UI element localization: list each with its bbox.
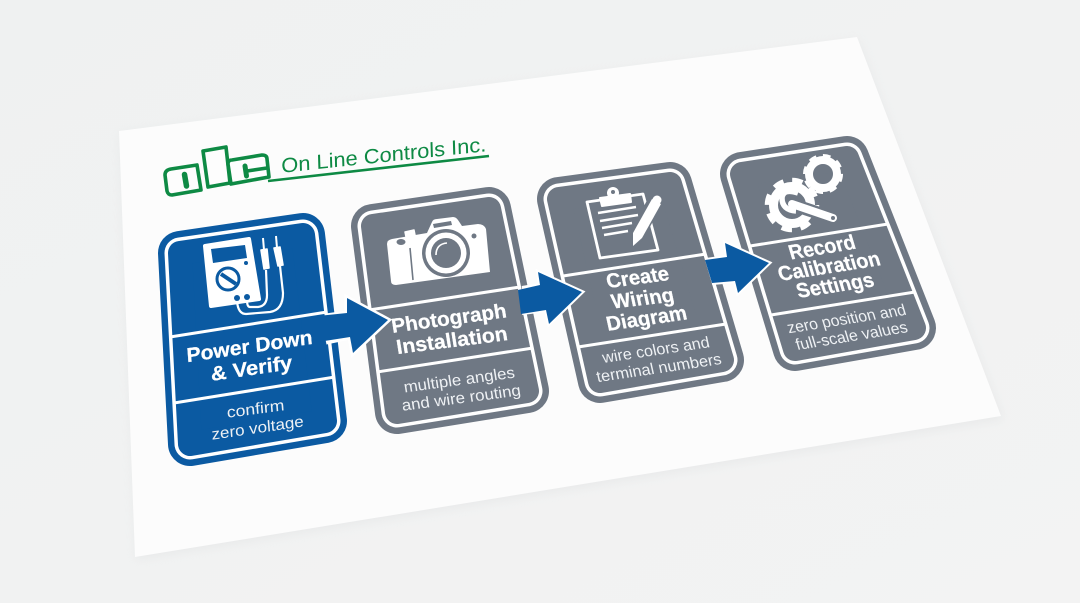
text: zero position and full-scale values: zero position and [785, 302, 908, 337]
panel: step 1 power down and verify [170, 235, 335, 444]
heading: photograph installation [390, 300, 509, 359]
text: confirm zero voltage [211, 397, 304, 444]
panel: step 2 photograph installation [369, 209, 533, 415]
text: confirm zero voltage: confirm [226, 397, 285, 422]
text: zero position and full-scale values [785, 302, 910, 354]
paper sheet [119, 37, 1004, 560]
icon: multimeter [205, 236, 283, 314]
text: wire colors and terminal numbers: terminal numbers [595, 351, 723, 386]
icon: gears and wrench [768, 156, 841, 230]
text: zero position and full-scale values: full-scale values [794, 319, 910, 354]
logo wordmark: On Line Controls Inc. [281, 133, 487, 178]
heading: record calibration settings: Record [786, 232, 858, 264]
heading: create wiring diagram: Wiring [609, 285, 676, 313]
icon: clipboard and pencil [587, 187, 662, 258]
arrow: step 3 to step 4 [705, 243, 769, 293]
logo mark: olc [165, 147, 269, 195]
icon: camera [387, 217, 490, 285]
heading: power down and verify [186, 327, 313, 386]
text: multiple angles and wire routing: and wire routing [401, 382, 522, 415]
heading: create wiring diagram: Diagram [604, 302, 689, 336]
heading: create wiring diagram: Create [604, 263, 671, 293]
arrow: step 1 to step 2 [318, 298, 388, 353]
heading: record calibration settings: Settings [794, 269, 877, 303]
text: multiple angles and wire routing: multiple angles [402, 364, 516, 397]
text: confirm zero voltage: zero voltage [211, 413, 304, 444]
heading: photograph installation: Photograph [390, 300, 508, 338]
arrow: step 2 to step 3 [518, 272, 582, 324]
panel: step 4 record calibration settings [742, 156, 915, 354]
heading: photograph installation: Installation [395, 323, 509, 359]
text: wire colors and terminal numbers [595, 334, 723, 386]
text: multiple angles and wire routing [401, 364, 522, 415]
logo: On Line Controls [165, 133, 489, 195]
heading: record calibration settings: Calibration [775, 248, 883, 286]
logo underline [268, 156, 489, 181]
heading: power down and verify: & Verify [210, 352, 294, 386]
heading: create wiring diagram [604, 263, 689, 336]
text: wire colors and terminal numbers: wire colors and [600, 334, 711, 367]
heading: record calibration settings [775, 232, 883, 303]
heading: power down and verify: Power Down [186, 327, 313, 367]
panel: step 3 create wiring diagram [559, 184, 726, 386]
